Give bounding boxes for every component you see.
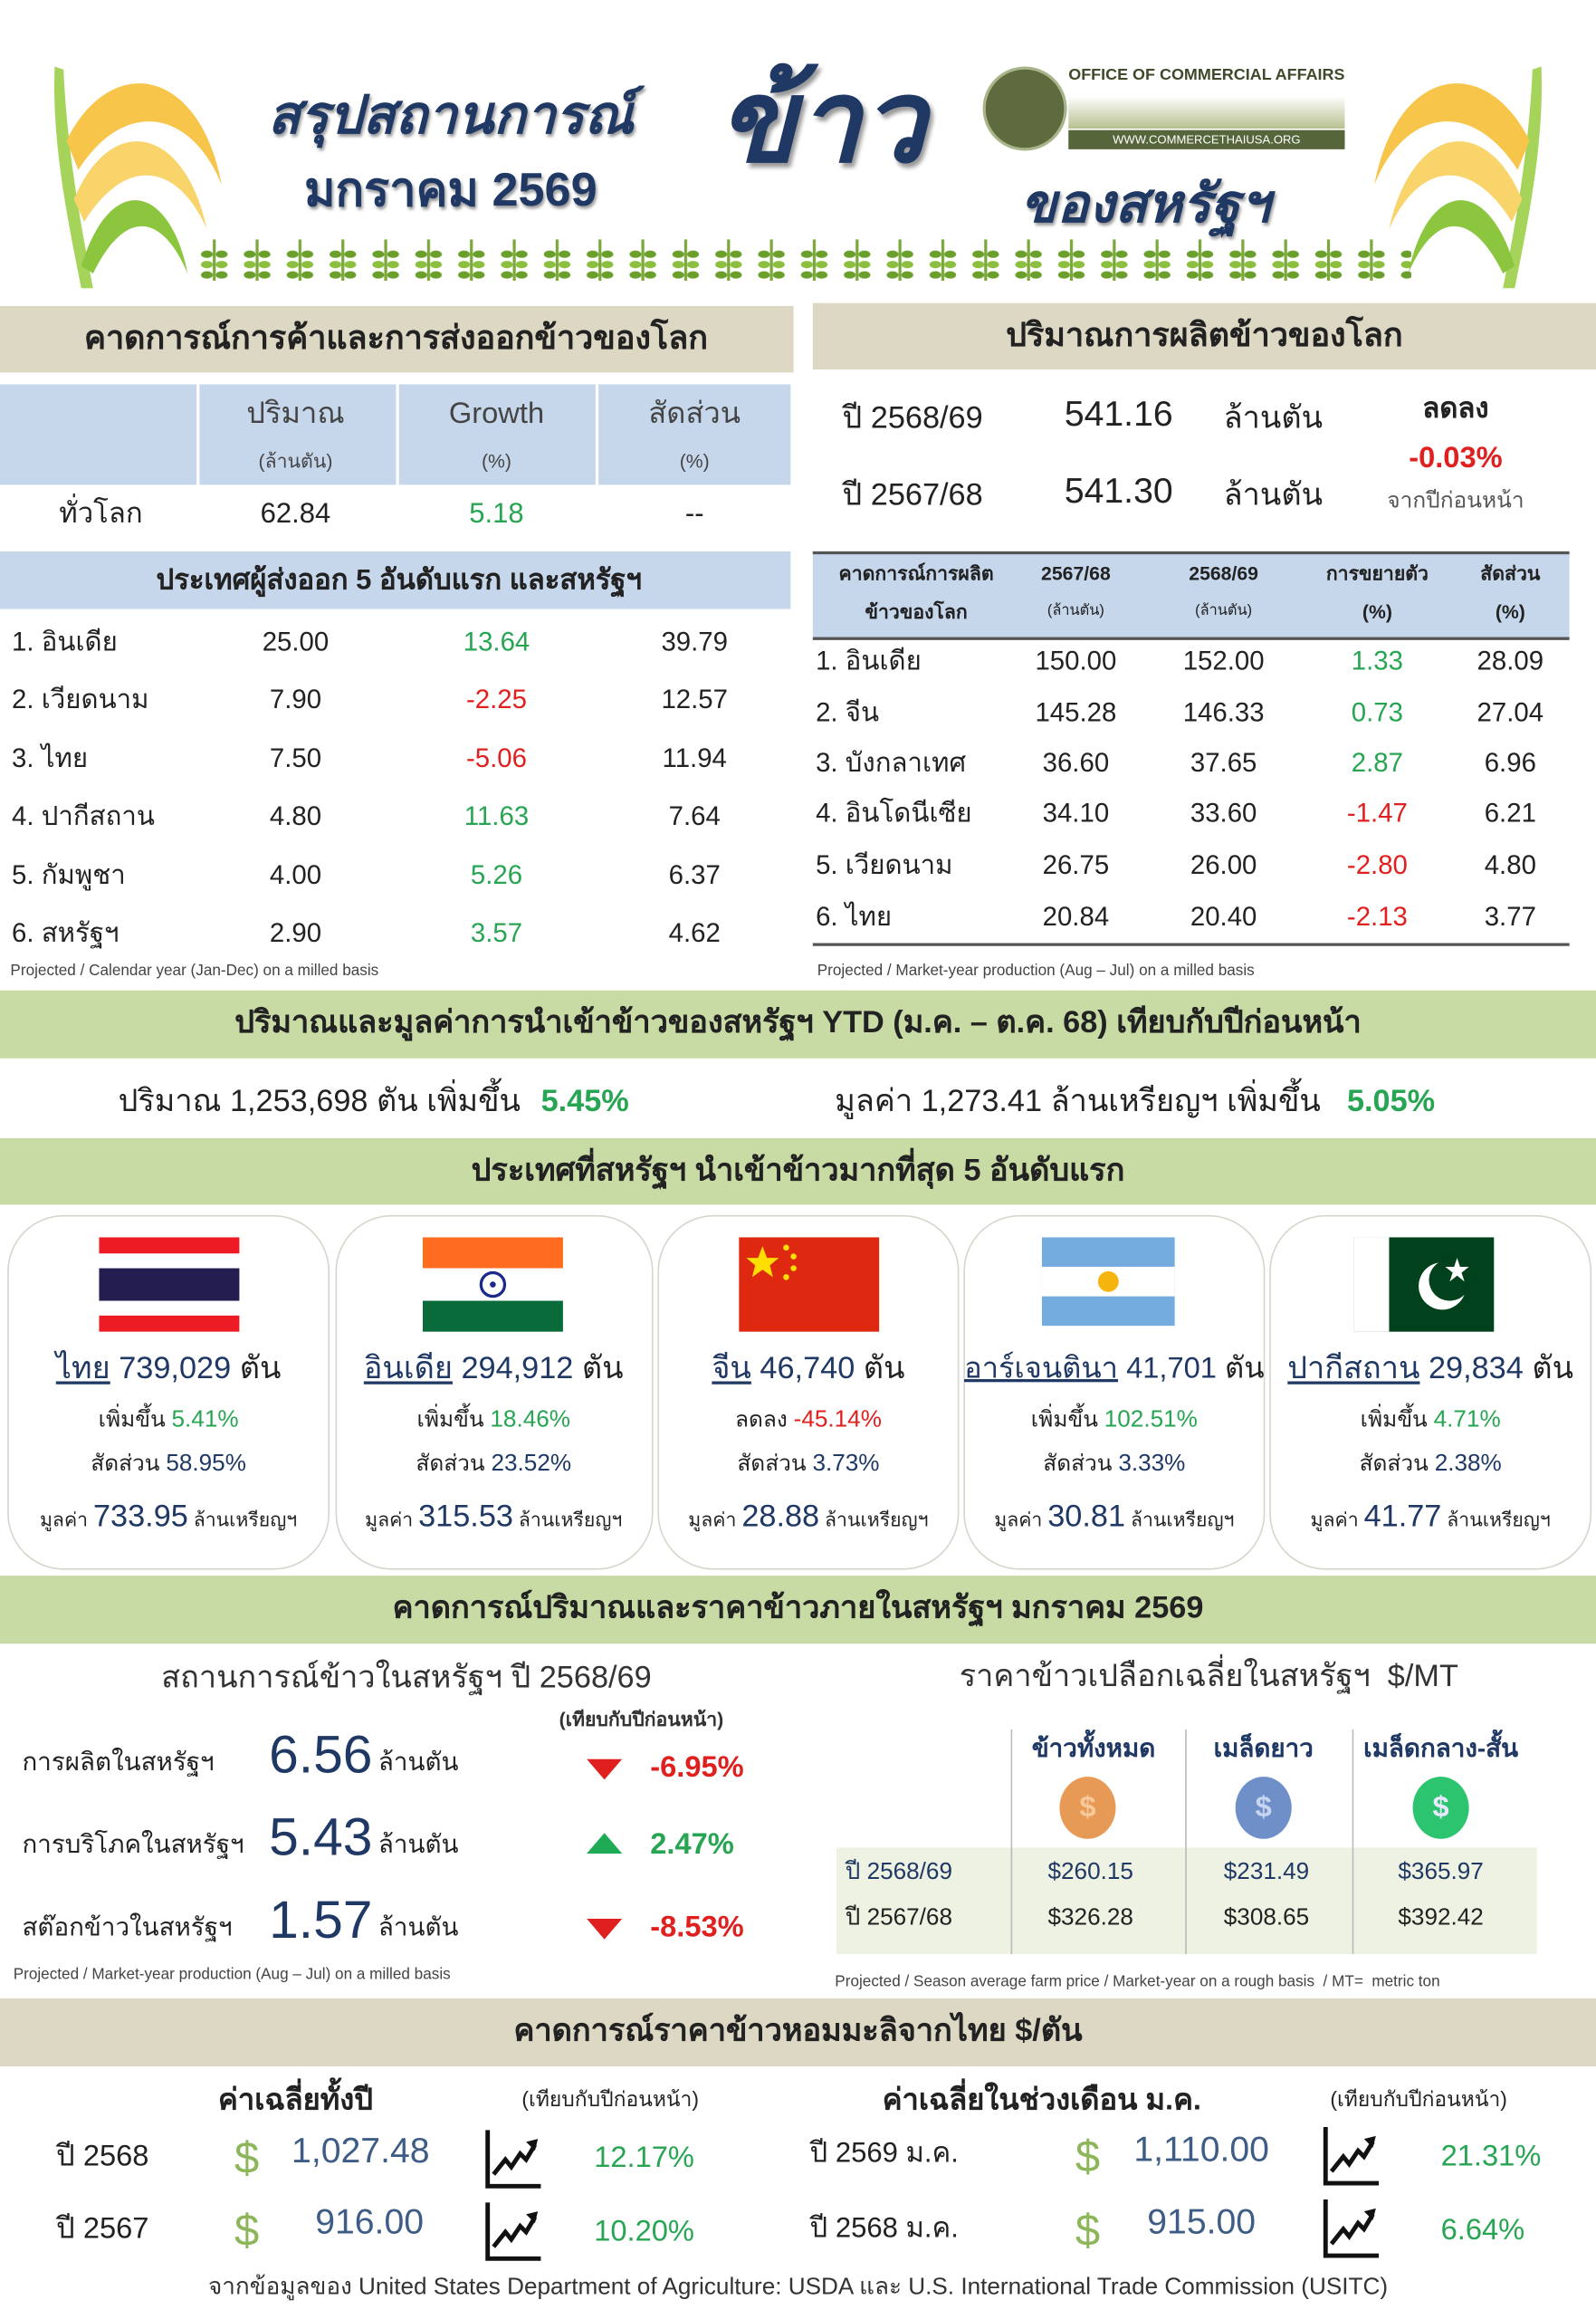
panel: US rice situation: การผลิตในสหรัฐฯ (22, 1748, 215, 1776)
panel: annual average: 1,027.48 (291, 2132, 430, 2171)
panel: world trade: -2.25 (466, 685, 527, 714)
volume: ปริมาณ 1,253,698 ตัน เพิ่มขึ้น 5.45% (119, 1084, 629, 1118)
icon: Thai flag (99, 1237, 239, 1332)
panel: world production: 2567/68 (1041, 562, 1111, 585)
summary: ปี 2568/69 (842, 401, 983, 436)
panel: world trade: -- (685, 499, 704, 530)
panel: world production: 6.21 (1485, 799, 1536, 828)
panel: world trade: สัดส่วน (648, 398, 741, 430)
panel: world production: 6. ไทย (816, 902, 892, 931)
panel: world production: (%) (1362, 601, 1392, 623)
panel: world trade: 6.37 (669, 860, 721, 890)
panel: world trade: (%) (680, 450, 710, 473)
panel: world trade: 4. ปากีสถาน (12, 801, 155, 830)
panel: world production: 146.33 (1183, 697, 1265, 727)
panel: world production: ล้านตัน (1224, 401, 1323, 436)
panel: world production: 541.16 (1065, 395, 1173, 435)
panel: world trade: -5.06 (466, 743, 527, 773)
panel: US paddy price: $326.28 (1048, 1905, 1133, 1931)
panel: world trade: 25.00 (263, 627, 329, 656)
panel: world production: 36.60 (1043, 748, 1109, 778)
panel: US rice situation: การบริโภคในสหรัฐฯ (22, 1831, 244, 1859)
panel: world production: ข้าวของโลก (865, 601, 968, 623)
panel: January average: (เทียบกับปีก่อนหน้า) (1330, 2087, 1507, 2111)
panel: US paddy price: $260.15 (1048, 1860, 1133, 1884)
panel: annual average: ค่าเฉลี่ยทั้งปี (218, 2084, 373, 2117)
panel: world production: 4. อินโดนีเซีย (816, 799, 972, 828)
panel: US rice situation: 6.56 (269, 1723, 372, 1784)
card: China: ลดลง -45.14% (735, 1407, 882, 1433)
panel: US rice situation: -8.53% (650, 1912, 744, 1944)
icon: China flag (739, 1237, 880, 1332)
panel: world trade: 13.64 (464, 627, 530, 656)
panel: world trade: 11.63 (464, 801, 529, 830)
panel: US paddy price: $ (1256, 1791, 1272, 1824)
icon: trend chart (485, 2130, 541, 2189)
panel: world production: 152.00 (1183, 646, 1265, 676)
card: Argentina (963, 1215, 1265, 1570)
panel: world production: -2.80 (1347, 850, 1408, 879)
panel: world trade: 4.62 (669, 918, 721, 947)
panel: January average: $ (1075, 2207, 1100, 2256)
heading (813, 303, 1596, 369)
subtitle USA: ของสหรัฐฯ (1020, 173, 1270, 234)
panel: US rice situation: 1.57 (269, 1889, 372, 1950)
panel: January average: 21.31% (1441, 2141, 1541, 2173)
panel: US paddy price: $231.49 (1224, 1860, 1309, 1884)
panel: US imports YTD: ปริมาณและมูลค่าการนำเข้าข้าวของสหรัฐฯ YTD (ม.ค. – ต.ค. 68) เทียบกับปีก่อนหน้า (234, 1006, 1362, 1040)
heading: top 5 import sources (0, 1138, 1596, 1204)
panel: US paddy price: ราคาข้าวเปลือกเฉลี่ยในสหรัฐฯ $/MT (960, 1659, 1458, 1693)
card: India: อินเดีย 294,912 ตัน (364, 1352, 624, 1385)
panel: world production: 1.33 (1352, 646, 1403, 676)
panel: US rice situation: ล้านตัน (378, 1748, 458, 1776)
header (54, 56, 1542, 288)
subheading (0, 551, 790, 609)
panel: world production: สัดส่วน (1480, 562, 1540, 585)
panel: world production: 5. เวียดนาม (816, 850, 953, 879)
panel: world production: จากปีก่อนหน้า (1387, 489, 1524, 513)
panel: US paddy price: $365.97 (1398, 1860, 1484, 1884)
panel: annual average: ปี 2567 (56, 2213, 148, 2246)
card: Argentina: สัดส่วน 3.33% (1043, 1452, 1185, 1477)
panel: world production: การขยายตัว (1326, 562, 1429, 585)
panel: world trade: Growth (449, 398, 544, 430)
heading (0, 991, 1596, 1059)
panel: world production: 2568/69 (1189, 562, 1258, 585)
card: Pakistan: เพิ่มขึ้น 4.71% (1361, 1407, 1501, 1433)
panel: world trade (0, 306, 794, 980)
panel: world trade: ปริมาณ (246, 398, 345, 430)
heading (0, 306, 794, 372)
panel: world production: 1. อินเดีย (816, 646, 922, 676)
logo: OFFICE OF COMMERCIAL AFFAIRS (1068, 66, 1344, 84)
big title rice: ข้าว (718, 56, 926, 187)
panel: January average: $ (1075, 2133, 1100, 2181)
panel: world trade: 11.94 (663, 743, 727, 773)
panel: world production: ลดลง (1422, 394, 1489, 425)
panel: world trade: 2.90 (270, 918, 321, 947)
panel: January average: 1,110.00 (1133, 2130, 1269, 2170)
panel: US paddy price: ข้าวทั้งหมด (1032, 1735, 1155, 1763)
panel: world production: ปริมาณการผลิตข้าวของโลก (1006, 316, 1403, 353)
panel: US paddy price: $308.65 (1224, 1905, 1309, 1931)
panel: world production: 37.65 (1190, 748, 1257, 778)
panel: world trade: 12.57 (661, 685, 728, 714)
heading: Thai jasmine price: คาดการณ์ราคาข้าวหอมมะลิจากไทย $/ตัน (513, 2014, 1083, 2048)
panel: world trade: ประเทศผู้ส่งออก 5 อันดับแรก และสหรัฐฯ (157, 565, 642, 597)
logo (983, 66, 1345, 150)
panel: world production: -1.47 (1347, 799, 1408, 828)
heading: US domestic outlook: คาดการณ์ปริมาณและราคาข้าวภายในสหรัฐฯ มกราคม 2569 (393, 1591, 1203, 1625)
panel: US paddy price: $392.42 (1398, 1905, 1484, 1931)
panel: world production: 33.60 (1190, 799, 1257, 828)
panel: US rice situation: -6.95% (650, 1751, 744, 1784)
icon: coins (1059, 1777, 1115, 1839)
panel: world production: 3.77 (1485, 902, 1536, 931)
panel: world trade: 7.50 (270, 743, 321, 773)
card: Thailand: มูลค่า 733.95 ล้านเหรียญฯ (40, 1500, 297, 1534)
panel: annual average: (เทียบกับปีก่อนหน้า) (521, 2087, 699, 2111)
card: China: สัดส่วน 3.73% (737, 1452, 880, 1477)
heading: top 5 import sources: ประเทศที่สหรัฐฯ นำเข้าข้าวมากที่สุด 5 อันดับแรก (472, 1154, 1124, 1188)
icon: rice stalk right (1374, 67, 1542, 288)
panel: US paddy price: $ (1433, 1791, 1449, 1824)
panel: world production: คาดการณ์การผลิต (839, 562, 994, 585)
panel: world production: (ล้านตัน) (1047, 603, 1104, 619)
panel: January average: 6.64% (1441, 2214, 1524, 2247)
card: China: จีน 46,740 ตัน (712, 1352, 905, 1385)
panel: annual average: 12.17% (594, 2142, 694, 2174)
panel: world trade: 7.90 (270, 685, 321, 714)
title: สรุปสถานการณ์ (268, 84, 634, 145)
panel: world production: 145.28 (1035, 697, 1116, 727)
panel: world trade: 3.57 (471, 918, 522, 947)
panel: US rice situation: Projected / Market-year production (Aug – Jul) on a milled basis (14, 1966, 451, 1983)
panel: world production: 28.09 (1477, 646, 1543, 676)
panel: world trade: 5. กัมพูชา (12, 860, 126, 890)
card: Thailand: เพิ่มขึ้น 5.41% (99, 1407, 239, 1433)
card: China: มูลค่า 28.88 ล้านเหรียญฯ (688, 1500, 929, 1534)
panel: January average: ปี 2569 ม.ค. (810, 2138, 959, 2170)
panel: world trade: 1. อินเดีย (12, 627, 118, 656)
panel: world production: (ล้านตัน) (1195, 603, 1252, 619)
panel: US rice situation: 5.43 (269, 1806, 372, 1867)
panel: world production: 541.30 (1065, 472, 1173, 512)
world row: ทั่วโลก (59, 499, 143, 530)
panel: annual average (56, 2077, 699, 2261)
heading: US domestic outlook (0, 1576, 1596, 1643)
icon: Pakistan flag (1353, 1237, 1494, 1332)
card: Thailand: สัดส่วน 58.95% (91, 1452, 246, 1477)
icon: coins: $ (1079, 1791, 1096, 1824)
card: Argentina: อาร์เจนตินา 41,701 ตัน (964, 1353, 1265, 1385)
value: มูลค่า 1,273.41 ล้านเหรียญฯ เพิ่มขึ้น 5.05% (835, 1084, 1435, 1118)
panel: US paddy price: Projected / Season average farm price / Market-year on a rough basis / MT= metric ton (835, 1973, 1440, 1990)
panel: world trade: (ล้านตัน) (259, 450, 332, 473)
icon: India flag (422, 1237, 563, 1332)
panel: US rice situation: สต๊อกข้าวในสหรัฐฯ (22, 1913, 233, 1941)
panel: world production: 0.73 (1352, 697, 1403, 727)
panel: annual average: $ (234, 2134, 259, 2183)
panel: world trade: 7.64 (669, 801, 721, 830)
panel: world trade: 3. ไทย (12, 743, 88, 773)
panel: annual average: ปี 2568 (56, 2141, 148, 2173)
card: India (336, 1215, 654, 1570)
card: China (657, 1215, 959, 1570)
footer source: จากข้อมูลของ United States Department of Agriculture: USDA และ U.S. International Trade Commission (USITC) (208, 2275, 1388, 2300)
panel: US paddy price: เมล็ดกลาง-สั้น (1363, 1735, 1518, 1763)
logo: WWW.COMMERCETHAIUSA.ORG (1113, 133, 1301, 147)
panel: world production: ปี 2567/68 (842, 478, 983, 513)
card: India: สัดส่วน 23.52% (416, 1452, 571, 1477)
panel: world production: 4.80 (1485, 850, 1536, 879)
panel: world production (813, 302, 1596, 980)
panel: world production: 6.96 (1485, 748, 1536, 778)
panel: US rice situation: สถานการณ์ข้าวในสหรัฐฯ ปี 2568/69 (161, 1661, 652, 1695)
panel: world production: 20.40 (1190, 902, 1257, 931)
panel: world production: 26.75 (1043, 850, 1109, 879)
icon: rice stalk left (54, 67, 222, 288)
panel: January average: 915.00 (1147, 2202, 1256, 2242)
production rows (813, 646, 1570, 946)
panel: world production: 20.84 (1043, 902, 1109, 931)
panel: world production: 2.87 (1352, 748, 1403, 778)
panel: world trade: คาดการณ์การค้าและการส่งออกข้าวของโลก (84, 320, 708, 356)
panel: world production: 26.00 (1190, 850, 1257, 879)
heading: Thai jasmine price (0, 1998, 1596, 2066)
panel: US rice situation: (เทียบกับปีก่อนหน้า) (559, 1708, 723, 1730)
panel: US paddy price: ปี 2568/69 (846, 1860, 952, 1884)
panel: world trade: (%) (482, 450, 511, 473)
card: India: มูลค่า 315.53 ล้านเหรียญฯ (365, 1500, 622, 1534)
card: Argentina: มูลค่า 30.81 ล้านเหรียญฯ (994, 1500, 1234, 1534)
card: Pakistan: ปากีสถาน 29,834 ตัน (1287, 1352, 1573, 1385)
card: Argentina: เพิ่มขึ้น 102.51% (1031, 1407, 1198, 1433)
panel: world production: ล้านตัน (1224, 478, 1323, 513)
panel: US paddy price: ปี 2567/68 (846, 1905, 952, 1931)
panel: US imports YTD (0, 991, 1596, 1119)
table header (0, 384, 790, 484)
panel: world production: 2. จีน (816, 697, 879, 727)
subtitle date: มกราคม 2569 (304, 163, 597, 216)
card: Pakistan (1269, 1215, 1591, 1570)
table header (813, 551, 1570, 640)
panel: world production: 150.00 (1035, 646, 1116, 676)
card: India: เพิ่มขึ้น 18.46% (416, 1407, 570, 1433)
icon: Argentina flag (1041, 1237, 1175, 1326)
card: Pakistan: มูลค่า 41.77 ล้านเหรียญฯ (1311, 1500, 1551, 1534)
panel: world production: -2.13 (1347, 902, 1408, 931)
panel: US rice situation (14, 1659, 744, 1983)
panel: world production: 27.04 (1477, 697, 1543, 727)
panel: world trade: 62.84 (261, 499, 330, 530)
panel: annual average: 916.00 (315, 2202, 424, 2242)
panel: world trade: 39.79 (661, 627, 728, 656)
panel: world production: (%) (1496, 601, 1525, 623)
panel: US rice situation: 2.47% (650, 1828, 734, 1861)
footnote: Projected / Calendar year (Jan-Dec) on a milled basis (10, 962, 378, 980)
panel: world production: 34.10 (1043, 799, 1109, 828)
footnote: Projected / Market-year production (Aug – Jul) on a milled basis (817, 962, 1255, 980)
panel: world trade: 5.26 (471, 860, 522, 890)
panel: annual average: $ (234, 2207, 259, 2256)
exporter rows (12, 627, 728, 949)
panel: world production: -0.03% (1409, 442, 1503, 474)
panel: US rice situation: ล้านตัน (378, 1831, 458, 1859)
panel: January average (809, 2078, 1541, 2258)
panel: world production: 3. บังกลาเทศ (816, 748, 966, 778)
panel: world trade: 6. สหรัฐฯ (12, 918, 119, 947)
panel: world trade: 4.80 (270, 801, 321, 830)
panel: world trade: 5.18 (469, 499, 524, 530)
panel: US paddy price (835, 1653, 1537, 1990)
panel: US paddy price: เมล็ดยาว (1214, 1735, 1314, 1763)
card: Thailand: ไทย 739,029 ตัน (56, 1352, 281, 1385)
card: Thailand (7, 1215, 330, 1570)
panel: January average: ค่าเฉลี่ยในช่วงเดือน ม.ค. (883, 2084, 1201, 2117)
panel: world trade: 2. เวียดนาม (12, 685, 149, 714)
panel: US rice situation: ล้านตัน (378, 1913, 458, 1941)
panel: world trade: 4.00 (270, 860, 321, 890)
card: Pakistan: สัดส่วน 2.38% (1360, 1452, 1502, 1477)
panel: annual average: 10.20% (594, 2216, 694, 2248)
panel: January average: ปี 2568 ม.ค. (810, 2214, 959, 2245)
